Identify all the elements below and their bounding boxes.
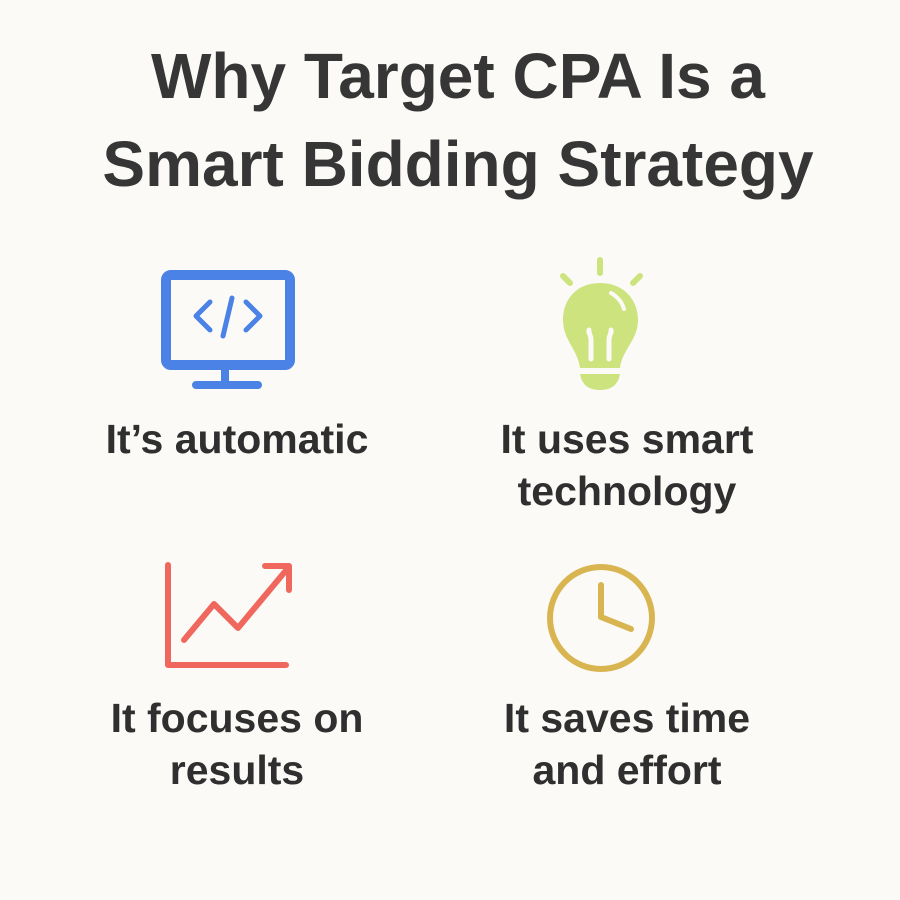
label: saves time: It saves time <box>504 695 750 741</box>
label: results: results <box>170 747 304 793</box>
icon: lightbulb <box>563 260 640 390</box>
label: smart technology <box>501 416 753 514</box>
icon: clock <box>550 567 652 669</box>
label: saves time <box>504 695 750 793</box>
title: Smart Bidding Strategy <box>102 128 814 200</box>
label: smart technology: It uses smart <box>501 416 753 462</box>
icon: monitor <box>166 275 290 385</box>
icon: growth chart <box>168 565 289 665</box>
title: Why Target CPA Is a <box>151 40 765 112</box>
label: saves time: and effort <box>532 747 722 793</box>
label: automatic: It’s automatic <box>106 416 368 462</box>
label: smart technology: technology <box>518 468 736 514</box>
title <box>102 40 814 200</box>
label: results: It focuses on <box>111 695 363 741</box>
label: results <box>111 695 363 793</box>
